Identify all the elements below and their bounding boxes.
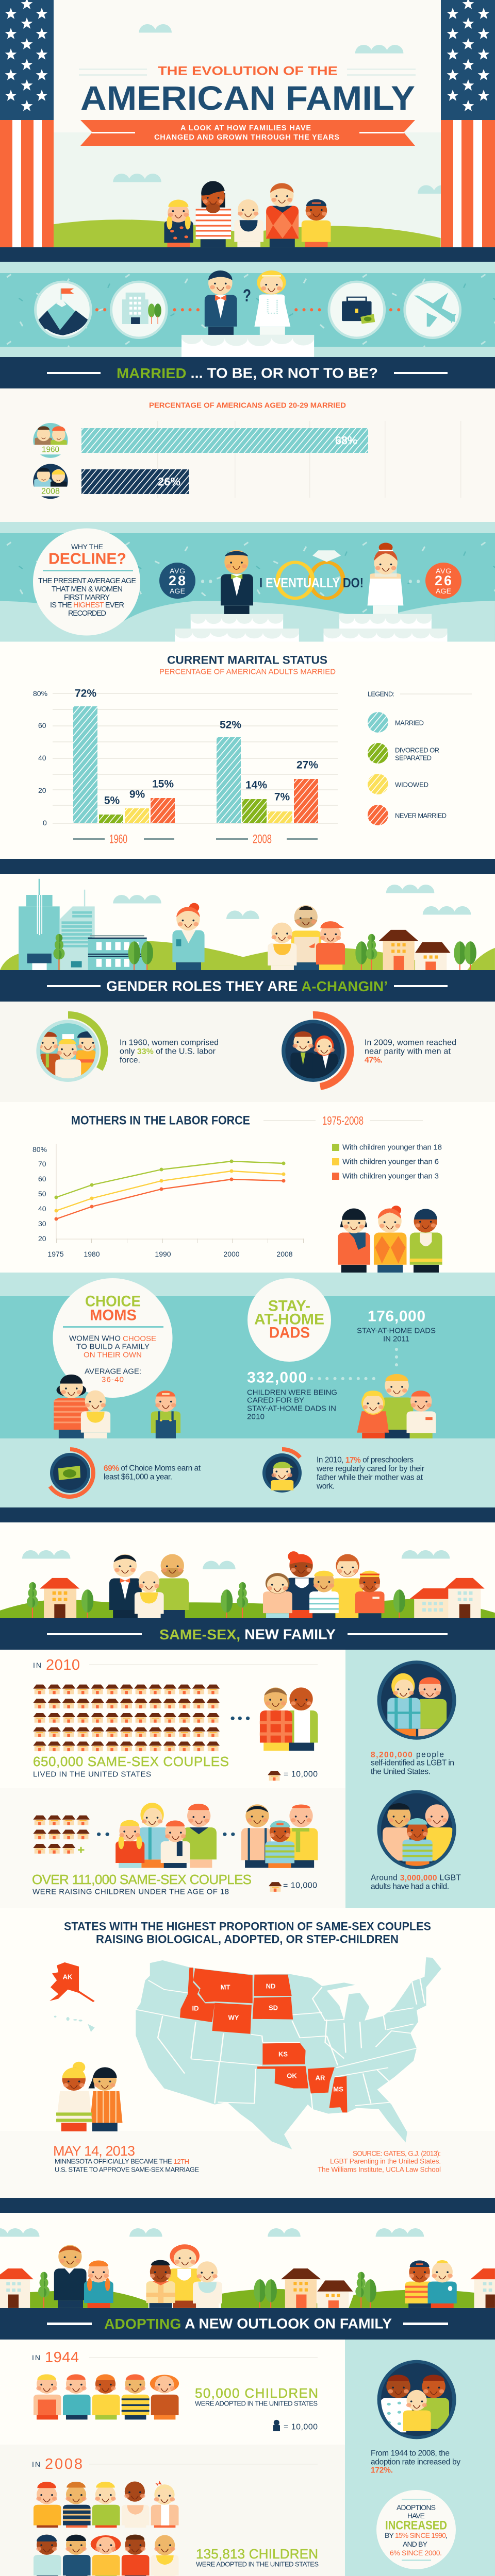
line chart: 40 bbox=[38, 1205, 46, 1213]
rings bbox=[278, 562, 343, 598]
line chart: 80% bbox=[32, 1145, 47, 1154]
stat: 332,000: CHILDREN WERE BEING bbox=[247, 1388, 337, 1397]
bar value labels bbox=[75, 687, 318, 807]
text: 3,000,000: Around 3,000,000 LGBT bbox=[371, 1873, 461, 1883]
in 2008 heading: 2008 bbox=[45, 2456, 82, 2472]
state labels: SD bbox=[269, 2004, 278, 2011]
text: 650,000 couples bbox=[33, 1754, 318, 1778]
oval: choice moms: AVERAGE AGE: bbox=[85, 1367, 141, 1376]
ring chart: 47 percent bbox=[282, 1015, 350, 1087]
I eventually do text: I EVENTUALLY DO! bbox=[259, 575, 364, 590]
line chart: 1990 bbox=[155, 1250, 171, 1258]
bar value labels: 52% bbox=[220, 719, 241, 731]
state labels bbox=[63, 1973, 343, 2093]
in 1944 heading bbox=[32, 2349, 318, 2366]
couple 2008 avatar: 2008 bbox=[41, 487, 60, 496]
two kids bbox=[405, 2260, 457, 2308]
badge: average age 26: AGE bbox=[436, 587, 451, 595]
badge: average age 26 bbox=[425, 563, 461, 599]
couple 1960 avatar bbox=[31, 423, 70, 458]
children pictogram 1944 bbox=[34, 2374, 280, 2431]
houses and trees bbox=[0, 2268, 495, 2308]
two dads and baby bbox=[109, 1554, 189, 1618]
in 1944 heading: IN bbox=[32, 2353, 40, 2362]
text: 111,000 couples bbox=[32, 1872, 317, 1896]
panel: choice moms and stay-at-home dads bbox=[0, 1273, 495, 1507]
in 2008 heading: IN bbox=[32, 2460, 40, 2468]
panel: map of states: STATES WITH THE HIGHEST PROPORTION OF SAME-SEX COUPLES bbox=[64, 1920, 431, 1933]
adoption families scene bbox=[0, 2228, 495, 2308]
stat: 332,000: 2010 bbox=[247, 1413, 265, 1421]
person icon legend bbox=[273, 2420, 280, 2431]
text: 8,200,000: 8,200,000 people bbox=[371, 1751, 444, 1759]
badge: average age 28 bbox=[159, 563, 195, 599]
bar value labels: 5% bbox=[104, 794, 120, 807]
line chart: 60 bbox=[38, 1175, 46, 1183]
text: 172 percent bbox=[371, 2449, 460, 2475]
line chart: 20 bbox=[38, 1234, 46, 1243]
trees bbox=[53, 934, 476, 970]
bride at 26 bbox=[368, 543, 403, 614]
stat: 17 percent: father while their mother was at bbox=[317, 1473, 423, 1482]
ring chart: 33 percent bbox=[36, 1015, 104, 1082]
oval: adoptions have increased: 6% SINCE 2000. bbox=[390, 2549, 442, 2557]
oval: adoptions have increased: HAVE bbox=[407, 2512, 425, 2520]
highlighted states bbox=[50, 1962, 347, 2112]
house legend icon bbox=[268, 1771, 281, 1781]
stat: 17 percent: work. bbox=[316, 1482, 335, 1491]
callout oval: why the decline: IS THE HIGHEST EVER bbox=[50, 601, 124, 609]
panel: current marital status chart bbox=[33, 653, 472, 846]
stat: 176,000: 176,000 bbox=[368, 1308, 425, 1325]
line chart: 1975 bbox=[47, 1250, 64, 1258]
line chart: 2000 bbox=[223, 1250, 240, 1258]
line chart: 50 bbox=[38, 1190, 46, 1198]
oval: adoptions have increased: AND BY bbox=[403, 2540, 428, 2548]
stat: 332,000: 332,000 bbox=[247, 1369, 307, 1386]
source note bbox=[318, 2149, 441, 2173]
state labels: MT bbox=[221, 1984, 230, 1991]
section header: same-sex: SAME-SEX, NEW FAMILY bbox=[159, 1626, 336, 1642]
in 2010 heading: 2010 bbox=[46, 1657, 80, 1673]
legend: NEVER MARRIED bbox=[395, 812, 447, 819]
legend: MARRIED bbox=[395, 719, 424, 726]
date callout: MINNESOTA OFFICIALLY BECAME THE 12TH bbox=[55, 2158, 189, 2165]
oval: stay-at-home dads: AT-HOME bbox=[254, 1311, 324, 1328]
icon: mountain bbox=[34, 281, 92, 339]
text: 1960 labor share: only 33% of the U.S. labor bbox=[120, 1047, 216, 1056]
baby bbox=[234, 199, 263, 247]
state labels: WY bbox=[228, 2013, 239, 2022]
in 2010 heading bbox=[33, 1657, 318, 1673]
portrait: adoptive family bbox=[377, 2360, 456, 2439]
callout oval: why the decline bbox=[33, 529, 140, 636]
hero clouds and hills bbox=[54, 24, 451, 247]
y axis labels: 20 bbox=[38, 786, 46, 794]
state labels: KS bbox=[278, 2050, 288, 2058]
state labels: AR bbox=[316, 2074, 325, 2081]
stat: 17 percent bbox=[262, 1449, 424, 1493]
subtitle ribbon: CHANGED AND GROWN THROUGH THE YEARS bbox=[154, 133, 339, 142]
section header: same-sex bbox=[0, 1618, 495, 1650]
woman in stripes bbox=[196, 181, 231, 247]
bars 1960 bbox=[73, 706, 175, 823]
oval: adoptions have increased: INCREASED bbox=[385, 2518, 447, 2533]
legend: DIVORCED OR bbox=[395, 746, 439, 754]
bar 2008 bbox=[81, 469, 189, 494]
in 2008 heading bbox=[32, 2456, 318, 2472]
stat: 69 percent: 69% of Choice Moms earn at bbox=[104, 1464, 201, 1472]
US map bbox=[50, 1957, 441, 2149]
bar 1960 bbox=[81, 428, 368, 453]
oval: choice moms: CHOICE bbox=[85, 1293, 141, 1310]
year label 2008 bbox=[216, 833, 318, 846]
oval: choice moms bbox=[53, 1278, 172, 1398]
section header: married bbox=[0, 357, 495, 388]
in 2010 heading: IN bbox=[33, 1661, 41, 1669]
wedding question band bbox=[0, 262, 495, 357]
state labels: ID bbox=[192, 2004, 199, 2012]
text: 111,000 couples: = 10,000 bbox=[283, 1882, 317, 1890]
panel: same-sex couples counts bbox=[0, 1650, 495, 1908]
chart legend: With children younger than 3 bbox=[342, 1172, 439, 1181]
text: 111,000 couples: OVER 111,000 SAME-SEX COUPLES bbox=[32, 1872, 252, 1887]
portrait: women couple bbox=[377, 1660, 456, 1740]
bar 1960: 68% bbox=[335, 434, 357, 447]
subtitle ribbon: A LOOK AT HOW FAMILIES HAVE bbox=[180, 124, 311, 132]
stat: 176,000: STAY-AT-HOME DADS bbox=[357, 1326, 436, 1335]
couple 1960 avatar: 1960 bbox=[42, 445, 59, 454]
line chart: 30 bbox=[38, 1219, 46, 1228]
legend: WIDOWED bbox=[395, 781, 428, 788]
section header: adopting bbox=[0, 2308, 495, 2340]
family of four bbox=[116, 1803, 217, 1868]
callout oval: why the decline: RECORDED bbox=[68, 609, 106, 618]
mother with two kids bbox=[146, 2244, 222, 2308]
groom at 28 bbox=[221, 550, 253, 614]
stat: 332,000: CARED FOR BY bbox=[247, 1396, 304, 1404]
year label 1960: 1960 bbox=[109, 833, 127, 846]
oval: stay-at-home dads: DADS bbox=[269, 1324, 310, 1342]
father and daughter bbox=[54, 2245, 113, 2308]
y axis labels: 80% bbox=[33, 689, 47, 698]
city and workers scene bbox=[0, 879, 495, 970]
badge: average age 26: 26 bbox=[435, 573, 452, 588]
y axis labels: 60 bbox=[38, 721, 46, 730]
oval: choice moms: WOMEN WHO CHOOSE bbox=[69, 1334, 156, 1343]
y axis labels: 40 bbox=[38, 754, 46, 762]
state labels: MS bbox=[333, 2086, 343, 2093]
text: 1960 labor share: force. bbox=[120, 1056, 140, 1064]
line chart: 70 bbox=[38, 1160, 46, 1168]
stat: 69 percent bbox=[50, 1449, 201, 1497]
bars 2008 bbox=[217, 737, 318, 823]
panel: map of states bbox=[0, 1920, 495, 2198]
cakes bbox=[175, 614, 447, 642]
stat: 332,000 bbox=[247, 1369, 337, 1421]
legend bbox=[368, 690, 472, 825]
oval: choice moms: TO BUILD A FAMILY bbox=[76, 1343, 150, 1351]
date callout: MAY 14, 2013 bbox=[53, 2143, 135, 2159]
house pictogram: 650,000 couples bbox=[33, 1685, 318, 1781]
second row children bbox=[34, 2535, 61, 2576]
boy with cap bbox=[302, 199, 331, 247]
source note: SOURCE: GATES, G.J. (2013): bbox=[353, 2149, 441, 2158]
badge: average age 28: AGE bbox=[170, 587, 185, 595]
callout oval: why the decline: THE PRESENT AVERAGE AGE bbox=[38, 577, 136, 585]
text: 2009 labor share: near parity with men at bbox=[365, 1047, 451, 1056]
icon: office building bbox=[110, 281, 168, 339]
badge: average age 28: 28 bbox=[169, 573, 186, 588]
hero family of five bbox=[164, 181, 331, 247]
groom bbox=[205, 270, 237, 335]
wedding cake bbox=[182, 335, 314, 357]
section header: married: MARRIED ... TO BE, OR NOT TO BE? bbox=[117, 365, 378, 381]
state labels: ND bbox=[266, 1982, 275, 1990]
callout oval: why the decline: THAT MEN & WOMEN bbox=[52, 585, 123, 594]
text: 3,000,000 bbox=[371, 1873, 461, 1891]
bar value labels: 27% bbox=[296, 759, 318, 771]
date callout bbox=[53, 2143, 199, 2173]
text: 2009 labor share bbox=[365, 1039, 456, 1064]
line chart bbox=[32, 1144, 304, 1258]
oval: stay-at-home dads: STAY- bbox=[268, 1297, 310, 1315]
right flag bbox=[441, 0, 495, 247]
source note: LGBT Parenting in the United States. bbox=[330, 2158, 441, 2165]
text: 2009 labor share: In 2009, women reached bbox=[365, 1039, 456, 1047]
in 1944 heading: 1944 bbox=[45, 2349, 79, 2366]
stat: 17 percent: were regularly cared for by their bbox=[316, 1464, 424, 1473]
stat: 176,000: IN 2011 bbox=[383, 1334, 409, 1344]
hero section bbox=[0, 0, 495, 247]
legend: LEGEND: bbox=[368, 690, 394, 698]
chart legend: With children younger than 18 bbox=[342, 1143, 442, 1152]
stat: 332,000: STAY-AT-HOME DADS IN bbox=[247, 1404, 336, 1413]
diamond bbox=[312, 550, 341, 562]
text: 1960 labor share bbox=[120, 1039, 219, 1064]
title line 2: AMERICAN FAMILY bbox=[80, 79, 415, 117]
couple 2008 avatar bbox=[31, 464, 70, 499]
date callout: U.S. STATE TO APPROVE SAME-SEX MARRIAGE bbox=[55, 2166, 199, 2173]
state labels: AK bbox=[63, 1973, 73, 1980]
text: 8,200,000: the United States. bbox=[371, 1767, 431, 1776]
dad with two kids bbox=[357, 1374, 436, 1438]
text: 2009 labor share: 47%. bbox=[365, 1056, 383, 1064]
line chart: 2008 bbox=[276, 1250, 293, 1258]
text: 135,813 children bbox=[196, 2546, 319, 2576]
Hawaii bbox=[54, 2015, 95, 2032]
two moms with kids bbox=[263, 1551, 385, 1618]
panel: mothers in the labor force: MOTHERS IN THE LABOR FORCE bbox=[71, 1114, 250, 1127]
bar value labels: 7% bbox=[274, 791, 290, 803]
panel: map of states: RAISING BIOLOGICAL, ADOPTED, OR STEP-CHILDREN bbox=[96, 1933, 399, 1945]
badge: average age 28: AVG bbox=[170, 567, 185, 575]
panel: current marital status chart: PERCENTAGE OF AMERICAN ADULTS MARRIED bbox=[159, 668, 336, 676]
text: 8,200,000 bbox=[371, 1751, 454, 1776]
dotted connectors bbox=[310, 1348, 398, 1380]
y axis labels: 0 bbox=[43, 819, 47, 827]
text: 650,000 couples: 650,000 SAME-SEX COUPLES bbox=[33, 1754, 229, 1769]
section header: gender roles bbox=[0, 970, 495, 1002]
badge: average age 26: AVG bbox=[436, 567, 451, 575]
title line 1: THE EVOLUTION OF THE bbox=[158, 64, 338, 78]
stat: 176,000 bbox=[357, 1308, 436, 1344]
panel: percent married chart: PERCENTAGE OF AMERICANS AGED 20-29 MARRIED bbox=[149, 401, 346, 410]
bar value labels: 14% bbox=[245, 779, 267, 791]
oval: adoptions have increased bbox=[376, 2490, 456, 2569]
y axis labels bbox=[33, 689, 47, 827]
two brides bbox=[56, 2062, 123, 2131]
icon: airplane bbox=[403, 281, 461, 339]
stat: 69 percent: least $61,000 a year. bbox=[104, 1472, 172, 1482]
baker family bbox=[268, 905, 345, 970]
text: 650,000 couples: LIVED IN THE UNITED STATES bbox=[33, 1770, 151, 1778]
skyscraper bbox=[19, 879, 60, 970]
section header: gender roles: GENDER ROLES THEY ARE A-CHANGIN’ bbox=[106, 978, 388, 994]
panel: percent married chart bbox=[0, 388, 495, 522]
text: 50,000 children bbox=[195, 2385, 318, 2432]
year label 1960 bbox=[73, 833, 174, 846]
source note: The Williams Institute, UCLA Law School bbox=[318, 2166, 441, 2173]
girl with braids bbox=[164, 199, 193, 247]
text: 3,000,000: adults have had a child. bbox=[371, 1883, 449, 1891]
panel: adoption numbers bbox=[0, 2340, 495, 2576]
question mark text: ? bbox=[243, 286, 251, 306]
low building bbox=[88, 935, 147, 970]
line chart: 1980 bbox=[84, 1250, 100, 1258]
panel: labor force facts bbox=[36, 1011, 456, 1090]
bride bbox=[254, 270, 290, 335]
year label 2008: 2008 bbox=[253, 833, 272, 846]
portrait: family bbox=[377, 1790, 456, 1869]
oval: choice moms: MOMS bbox=[90, 1307, 137, 1324]
children pictogram 2008 bbox=[34, 2481, 179, 2528]
bar value labels: 72% bbox=[75, 687, 96, 700]
panel: mothers in the labor force bbox=[32, 1114, 442, 1273]
same-sex families scene bbox=[0, 1550, 495, 1618]
legend: SEPARATED bbox=[395, 754, 432, 761]
callout oval: why the decline: FIRST MARRY bbox=[64, 594, 110, 602]
house pictogram: 111,000 couples bbox=[33, 1803, 318, 1892]
text: 111,000 couples: WERE RAISING CHILDREN UNDER THE AGE OF 18 bbox=[32, 1888, 229, 1896]
houses and trees bbox=[27, 1578, 485, 1618]
mom, baby and boy bbox=[54, 1375, 180, 1438]
connector dots bbox=[201, 580, 420, 583]
couple bbox=[260, 1687, 318, 1751]
text: 50,000 children: WERE ADOPTED IN THE UNITED STATES bbox=[195, 2400, 318, 2407]
chart legend: With children younger than 6 bbox=[342, 1157, 439, 1166]
oval: choice moms: 36-40 bbox=[102, 1376, 124, 1384]
text: 1960 labor share: In 1960, women comprised bbox=[120, 1039, 219, 1047]
three mothers bbox=[338, 1206, 442, 1273]
chart legend bbox=[332, 1143, 442, 1181]
connector dots bbox=[95, 308, 400, 311]
text: 650,000 couples: = 10,000 bbox=[284, 1770, 318, 1778]
text: 135,813 children: 135,813 CHILDREN bbox=[196, 2546, 318, 2562]
text: 135,813 children: WERE ADOPTED IN THE UNITED STATES bbox=[196, 2561, 319, 2568]
oval: choice moms: ON THEIR OWN bbox=[84, 1351, 142, 1359]
text: 172 percent: 172%. bbox=[371, 2466, 393, 2475]
text: 8,200,000: self-identified as LGBT in bbox=[371, 1759, 454, 1767]
oval: adoptions have increased: ADOPTIONS bbox=[397, 2503, 436, 2512]
callout oval: why the decline: DECLINE? bbox=[48, 549, 126, 568]
oval: adoptions have increased: BY 15% SINCE 1990, bbox=[385, 2531, 448, 2539]
oval: stay-at-home dads bbox=[248, 1278, 331, 1362]
subtitle ribbon bbox=[80, 120, 415, 146]
panel: mothers in the labor force: 1975-2008 bbox=[322, 1114, 364, 1127]
text: 50,000 children: = 10,000 bbox=[284, 2422, 318, 2432]
panel: current marital status chart: CURRENT MARITAL STATUS bbox=[167, 653, 327, 667]
icon: briefcase with money bbox=[327, 281, 386, 339]
second family bbox=[241, 1804, 318, 1868]
panel: why the decline bbox=[0, 522, 495, 642]
bar value labels: 9% bbox=[129, 788, 145, 801]
state labels: OK bbox=[287, 2072, 297, 2079]
second tower bbox=[60, 890, 95, 970]
bar 2008: 26% bbox=[158, 475, 180, 488]
businesswoman bbox=[172, 903, 205, 970]
section header: adopting: ADOPTING A NEW OUTLOOK ON FAMILY bbox=[104, 2315, 392, 2332]
man in argyle bbox=[266, 183, 299, 247]
text: 50,000 children: 50,000 CHILDREN bbox=[195, 2385, 318, 2401]
callout oval: why the decline: WHY THE bbox=[71, 543, 103, 551]
houses bbox=[379, 930, 451, 970]
bar value labels: 15% bbox=[152, 778, 174, 790]
stat: 17 percent: In 2010, 17% of preschoolers bbox=[317, 1456, 414, 1464]
left flag bbox=[0, 0, 54, 247]
text: 172 percent: From 1944 to 2008, the bbox=[371, 2449, 450, 2458]
text: 172 percent: adoption rate increased by bbox=[371, 2458, 460, 2467]
